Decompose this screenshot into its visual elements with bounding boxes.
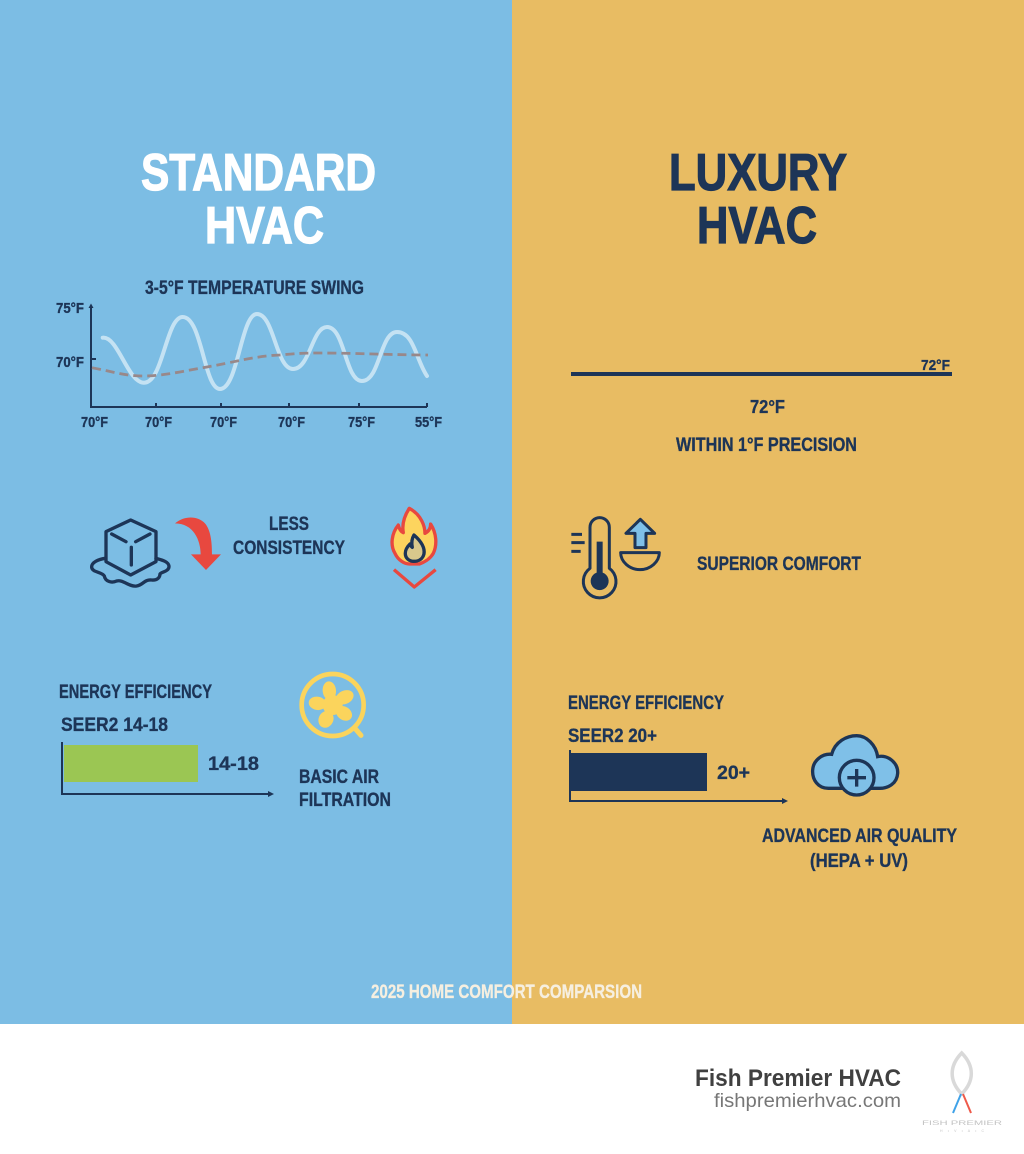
outer flame (392, 508, 436, 564)
chart: standard temperature swing (56, 277, 442, 431)
bar value: 20+ (717, 762, 750, 784)
x axis labels: 70°F (210, 414, 237, 431)
icon: flame with chevron (392, 508, 436, 587)
panel: luxury HVAC background (512, 0, 1024, 1024)
chart: standard energy efficiency (59, 681, 274, 797)
icon: yellow fan in magnifier (302, 674, 364, 736)
inner flame (405, 535, 424, 561)
y axis labels: 75°F (56, 300, 84, 317)
x axis labels (81, 414, 442, 431)
heading: luxury HVAC: LUXURY (669, 144, 847, 202)
text: less consistency: CONSISTENCY (233, 537, 345, 559)
chart title: 3-5°F TEMPERATURE SWING (145, 277, 364, 299)
chevron (394, 570, 436, 587)
x axis labels: 70°F (278, 414, 305, 431)
steady temperature label: 72°F (750, 397, 785, 417)
blue tail (953, 1094, 961, 1113)
fish outline (952, 1053, 971, 1094)
icon: red down arrow (175, 517, 221, 570)
cloud (813, 736, 898, 788)
line end label: 72°F (921, 357, 950, 374)
heading: standard HVAC: STANDARD (141, 144, 376, 202)
handle (355, 728, 361, 735)
precision label: WITHIN 1°F PRECISION (676, 434, 857, 456)
footer background (0, 1024, 1024, 1154)
x axis labels: 75°F (348, 414, 375, 431)
rating: SEER2 14-18 (61, 714, 168, 736)
text: advanced air quality: (HEPA + UV) (810, 850, 908, 872)
text: less consistency: LESS (269, 513, 309, 535)
text: advanced air quality (762, 825, 957, 872)
icon: melting ice cube (92, 520, 169, 586)
y axis labels (56, 300, 84, 371)
dashed setpoint curve (92, 353, 428, 376)
x axis labels: 55°F (415, 414, 442, 431)
y axis labels: 70°F (56, 354, 84, 371)
text: less consistency (233, 513, 345, 559)
axis arrow tip (782, 798, 788, 804)
chart axes (91, 306, 427, 407)
red tail (963, 1094, 971, 1113)
heading: luxury HVAC: HVAC (697, 197, 817, 255)
flat temperature line (571, 372, 952, 376)
up arrow (626, 519, 655, 548)
icon: cloud with plus (813, 736, 898, 795)
bowl (621, 553, 659, 570)
axes (570, 750, 786, 801)
text: basic air filtration: FILTRATION (299, 789, 391, 811)
axis arrow tip (268, 791, 274, 797)
x axis labels: 70°F (81, 414, 108, 431)
caption: 2025 comparison: 2025 HOME COMFORT COMPARSION (371, 981, 642, 1003)
logo name: FISH PREMIER (922, 1120, 1003, 1127)
panel: standard HVAC background (0, 0, 512, 1024)
text: basic air filtration (299, 766, 391, 811)
thermometer (583, 518, 616, 598)
actual temperature curve (103, 314, 427, 389)
text: basic air filtration: BASIC AIR (299, 766, 379, 788)
logo: Fish Premier HVAC (922, 1053, 1003, 1133)
heading: standard HVAC (141, 144, 376, 255)
heading: standard HVAC: HVAC (205, 197, 324, 255)
axes (62, 742, 272, 794)
logo sub-name: H • V • A • C (940, 1129, 984, 1133)
label: ENERGY EFFICIENCY (59, 681, 212, 703)
icon: thermometer with rising arrow (571, 518, 659, 598)
ring (302, 674, 364, 736)
fan blades (308, 681, 356, 730)
chart: luxury steady temperature (571, 357, 952, 456)
chart: luxury energy efficiency (568, 692, 788, 804)
footer brand name: Fish Premier HVAC (695, 1065, 901, 1092)
bar value: 14-18 (208, 753, 259, 775)
navy bar (571, 753, 707, 791)
rating: SEER2 20+ (568, 725, 657, 747)
plus badge (839, 760, 874, 795)
green bar (64, 745, 198, 782)
x axis labels: 70°F (145, 414, 172, 431)
text: advanced air quality: ADVANCED AIR QUALITY (762, 825, 957, 847)
axis arrow tip (88, 304, 94, 308)
thermometer fill (591, 542, 609, 590)
heading: luxury HVAC (669, 144, 847, 255)
label: ENERGY EFFICIENCY (568, 692, 724, 714)
footer website: fishpremierhvac.com (714, 1090, 901, 1112)
text: superior comfort: SUPERIOR COMFORT (697, 553, 861, 575)
heat dashes (571, 534, 585, 551)
